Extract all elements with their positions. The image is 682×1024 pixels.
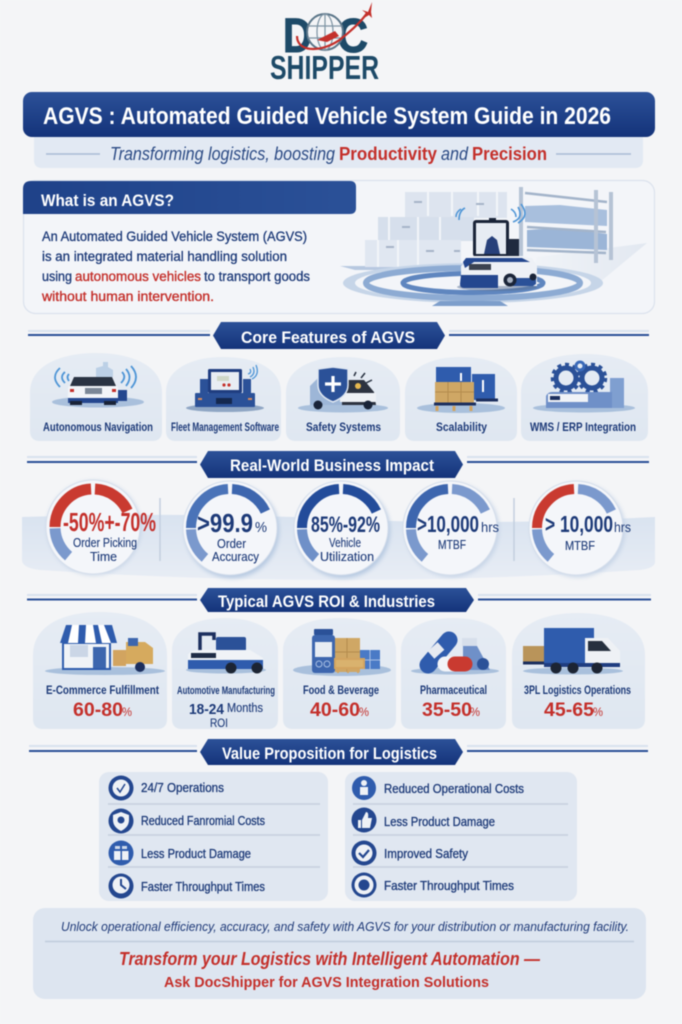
panel: food and beverage: % (359, 705, 369, 719)
icon: bottle and boxes (293, 629, 391, 676)
item: less product damage (352, 808, 495, 832)
icon: gears and machine (533, 362, 635, 412)
boxes (405, 192, 507, 218)
panel: what is an AGVS (23, 180, 654, 314)
panel: value list right (345, 772, 577, 901)
gauge: order picking time: Order Picking (73, 536, 137, 550)
panel: e-commerce fulfillment (33, 612, 167, 729)
gauge: MTBF second: > 10,000 (545, 511, 613, 537)
gauge: order accuracy: Accuracy (212, 550, 260, 564)
heading: what is an AGVS (23, 181, 356, 214)
gauge: MTBF second (521, 473, 631, 583)
panel: e-commerce fulfillment: E-Commerce Fulfillment (46, 685, 159, 697)
panel: business impact band (22, 473, 655, 583)
gauge: MTBF: MTBF (438, 538, 466, 552)
panel: fleet management software: Fleet Management Software (171, 422, 279, 434)
panel: pharmaceutical: % (470, 705, 480, 719)
gauge: vehicle utilization: Utilization (320, 550, 374, 564)
gauge: vehicle utilization (286, 473, 396, 583)
item: faster throughput times (108, 874, 265, 898)
section heading: core features (28, 322, 649, 349)
gauge: order picking time: Time (90, 550, 117, 564)
panel: pharmaceutical: Pharmaceutical (420, 685, 487, 697)
item: improved safety (352, 840, 469, 866)
subtitle band: Precision (472, 144, 547, 164)
text block: definition: is an integrated material handling solution (42, 249, 287, 264)
text block: definition (41, 229, 310, 304)
item: reduced costs: Reduced Fanromial Costs (141, 814, 265, 828)
subtitle band: Transforming logistics, boosting (110, 144, 335, 164)
panel: pharmaceutical (401, 618, 506, 729)
panel: 3PL logistics: 45-65 (544, 700, 594, 721)
text block: definition: without human intervention. (41, 289, 214, 304)
panel: food and beverage: Food & Beverage (303, 685, 379, 697)
panel: autonomous navigation: Autonomous Navigation (43, 422, 153, 434)
vehicle (457, 283, 537, 291)
item: improved safety: Improved Safety (384, 847, 469, 861)
section heading: value proposition (29, 739, 648, 765)
title bar: AGVS : Automated Guided Vehicle System Guide in 2026 (43, 103, 611, 130)
icon: delivery truck (523, 628, 623, 674)
panel: scalability: Scalability (436, 422, 488, 434)
item: reduced operational costs (352, 776, 524, 800)
callout: call to action: Transform your Logistics with Intelligent Automation — (119, 949, 541, 969)
section heading: real-world business impact (27, 451, 649, 478)
panel: autonomous navigation (30, 353, 162, 441)
section heading: ROI and industries (27, 588, 651, 612)
gauge: order accuracy: >99.9 (197, 508, 253, 538)
gauge: MTBF: >10,000 (417, 511, 479, 537)
panel: safety systems (286, 357, 400, 441)
logo: DocShipper: SHIPPER (270, 49, 379, 86)
gauge: MTBF: hrs (481, 519, 499, 535)
panel: automotive manufacturing: Automotive Manufacturing (177, 685, 275, 697)
gauge: order accuracy: Order (217, 537, 246, 551)
panel: scalability (405, 357, 517, 441)
panel: fleet management software (166, 357, 281, 441)
gauge: vehicle utilization: 85%-92% (311, 512, 380, 537)
floor rings (343, 263, 603, 303)
gauge: vehicle utilization: Vehicle (329, 536, 361, 550)
panel: automotive manufacturing: 18-24 (189, 701, 225, 718)
subtitle band: and (441, 144, 469, 164)
callout: call to action (33, 908, 646, 999)
gauge: MTBF (395, 473, 505, 583)
text block: definition: to transport goods (204, 269, 310, 284)
gauge: order accuracy: % (255, 519, 267, 536)
panel: automotive manufacturing: ROI (210, 716, 228, 730)
gauge: order accuracy (175, 473, 285, 583)
panel: safety systems: Safety Systems (306, 422, 381, 434)
icon: pills and bottle (411, 638, 499, 674)
panel: WMS / ERP integration: WMS / ERP Integration (530, 422, 636, 434)
icon: automotive AGV (186, 634, 266, 674)
panel: food and beverage (283, 618, 396, 729)
panel: e-commerce fulfillment: 60-80 (73, 700, 123, 721)
panel: automotive manufacturing: Months (227, 701, 263, 715)
item: reduced operational costs: Reduced Operational Costs (384, 782, 524, 796)
section heading: real-world business impact: Real-World Business Impact (230, 457, 434, 475)
panel: 3PL logistics (512, 613, 645, 729)
panel: 3PL logistics: % (593, 705, 603, 719)
text block: definition: An Automated Guided Vehicle System (AGVS) (42, 229, 307, 244)
subtitle band (34, 130, 643, 168)
shelf (525, 205, 607, 226)
panel: e-commerce fulfillment: % (122, 705, 132, 719)
logo: DocShipper: C (337, 10, 368, 63)
callout: call to action: Ask DocShipper for AGVS Integration Solutions (164, 974, 489, 991)
gauge: MTBF second: MTBF (565, 539, 595, 553)
gauge: order picking time (39, 473, 156, 581)
title bar (23, 92, 655, 137)
section heading: value proposition: Value Proposition for Logistics (222, 745, 437, 763)
item: 24/7 operations: 24/7 Operations (141, 781, 224, 795)
text block: definition: using (42, 269, 72, 284)
gauge: MTBF second: hrs (614, 519, 631, 535)
panel: food and beverage: 40-60 (310, 700, 360, 721)
item: faster throughput times: Faster Throughput Times (141, 880, 265, 894)
icon: autonomous car (52, 362, 144, 408)
item: faster throughput times: Faster Throughput Times (384, 879, 514, 893)
callout: call to action: Unlock operational efficiency, accuracy, and safety with AGVS for your distribution or manufacturing facility. (61, 919, 629, 934)
heading: what is an AGVS: What is an AGVS? (41, 191, 174, 210)
logo: DocShipper (270, 2, 379, 86)
panel: pharmaceutical: 35-50 (422, 700, 472, 721)
icon: shield and vehicle (298, 367, 388, 412)
panel: 3PL logistics: 3PL Logistics Operations (524, 685, 631, 697)
icon: storefront and cart (45, 625, 165, 675)
illustration: AGV in warehouse (340, 187, 647, 306)
text block: definition: autonomous vehicles (75, 269, 201, 284)
item: less product damage: Less Product Damage (141, 847, 251, 861)
icon: pallet stack (417, 367, 505, 413)
logo: DocShipper: D (283, 10, 312, 63)
item: reduced costs (108, 808, 265, 834)
section heading: core features: Core Features of AGVS (241, 329, 415, 347)
panel: WMS / ERP integration (521, 354, 648, 441)
item: less product damage: Less Product Damage (384, 815, 495, 829)
subtitle band: Productivity (339, 144, 437, 164)
section heading: ROI and industries: Typical AGVS ROI & Industries (218, 593, 435, 611)
icon: control console (186, 365, 264, 412)
item: faster throughput times (352, 872, 514, 898)
gauge: order picking time: -50%+-70% (63, 507, 156, 537)
item: 24/7 operations (108, 776, 224, 800)
panel: value list left (99, 772, 328, 901)
panel: automotive manufacturing (172, 618, 278, 730)
item: less product damage (108, 840, 251, 866)
